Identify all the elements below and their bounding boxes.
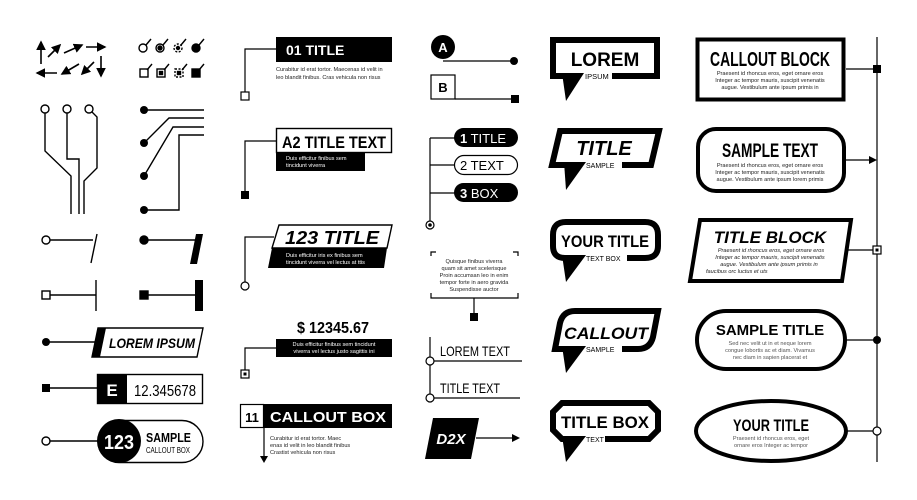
block: YOUR TITLE: ornare eros Integer ac tempor [734, 443, 808, 449]
label: 123 SAMPLE CALLOUT BOX: CALLOUT BOX [146, 445, 190, 455]
callout: A2 TITLE TEXT: tincidunt viverra [286, 163, 326, 169]
block: SAMPLE TITLE [697, 311, 881, 369]
callout: 11 CALLOUT BOX: CALLOUT BOX [270, 409, 386, 426]
block: TITLE BLOCK: Praesent id rhoncus eros, eget ornare eros [718, 248, 824, 254]
callout: 123 TITLE: Duis efficitur iris ex finibus sem [286, 253, 363, 259]
speech bubble: TITLE BOX: TITLE BOX [561, 413, 650, 432]
callout: $ 12345.67: viverra vel lectus justo sagittis ini [293, 349, 375, 355]
block: TITLE BLOCK: TITLE BLOCK [714, 228, 828, 247]
label: E 12.345678: 12.345678 [134, 383, 196, 400]
speech bubble: YOUR TITLE [553, 222, 658, 282]
block: SAMPLE TEXT: Integer ac tempor mauris, suscipit venenatis [715, 170, 825, 176]
speech bubble: LOREM: IPSUM [585, 72, 609, 81]
label: D2X arrow: D2X [436, 431, 467, 448]
block: CALLOUT BLOCK: CALLOUT BLOCK [710, 49, 830, 71]
text block: bracket: quam sit amet scelerisque [442, 266, 506, 272]
block: CALLOUT BLOCK: Integer ac tempor mauris, suscipit venenatis [715, 78, 825, 84]
label: E 12.345678: E [106, 381, 118, 400]
label: LOREM IPSUM: LOREM IPSUM [109, 335, 195, 351]
callout: 11 CALLOUT BOX: enas id velit in leo blandit finibus [270, 443, 350, 449]
label: A and B: B [438, 80, 448, 95]
block: SAMPLE TITLE: congue lobortis ac et diam. Vivamus [725, 348, 815, 354]
speech bubble: CALLOUT [555, 311, 658, 373]
callout: A2 TITLE TEXT: Duis efficitur finibus sem [286, 156, 347, 162]
list: LOREM TEXT / TITLE TEXT: LOREM TEXT [440, 343, 510, 359]
icon group: arrows [37, 42, 105, 76]
speech bubble: TITLE: TITLE [576, 138, 632, 160]
block: YOUR TITLE: Praesent id rhoncus eros, eget [733, 436, 810, 442]
text block: bracket [431, 252, 518, 321]
block: CALLOUT BLOCK [698, 40, 881, 100]
callout: 11 CALLOUT BOX: 11 [245, 410, 259, 425]
block: CALLOUT BLOCK: augue. Vestibulum ante ipsum primis in [721, 85, 819, 91]
callout: A2 TITLE TEXT: A2 TITLE TEXT [282, 133, 387, 152]
block: SAMPLE TEXT [698, 129, 877, 191]
speech bubble: TITLE [552, 131, 659, 190]
label: 123 SAMPLE CALLOUT BOX: 123 [104, 432, 134, 454]
label: 123 SAMPLE CALLOUT BOX [42, 419, 203, 463]
callout: 123 TITLE [241, 225, 392, 290]
label: 123 SAMPLE CALLOUT BOX: SAMPLE [146, 430, 191, 445]
callout: 11 CALLOUT BOX: Curabitur id erat tortor. Maec [270, 436, 341, 442]
callout: $ 12345.67 [241, 320, 392, 378]
label: E 12.345678 [42, 374, 202, 404]
icon group: check markers [139, 39, 204, 77]
callout: 01 TITLE: Curabitur id erat tortor. Maecenas id velit in [276, 67, 383, 73]
block: SAMPLE TEXT: Praesent id rhoncus eros, eget ornare eros [717, 163, 823, 169]
speech bubble: YOUR TITLE: TEXT BOX [586, 256, 621, 263]
text block: bracket: Quisque finibus viverra [446, 259, 503, 265]
list: LOREM TEXT / TITLE TEXT: TITLE TEXT [440, 380, 500, 396]
list: numbered pills: 1 TITLE [460, 131, 506, 146]
text block: bracket: Proin accumsan leo in enim [440, 273, 509, 279]
icon group: line terminators [42, 234, 203, 311]
callout: A2 TITLE TEXT [241, 128, 392, 199]
callout: 123 TITLE: tincidunt viverra vel lectus at ttis [286, 260, 365, 266]
callout: 01 TITLE: 01 TITLE [286, 42, 344, 58]
speech bubble: CALLOUT: CALLOUT [564, 324, 650, 343]
speech bubble: YOUR TITLE: YOUR TITLE [561, 232, 649, 251]
list: numbered pills: 2 TEXT [460, 158, 504, 173]
block: TITLE BLOCK: augue. Vestibulum ante ipsum primis in [720, 262, 818, 268]
icon group: circuit lines [41, 105, 97, 214]
callout: 01 TITLE: leo blandit finibus. Cras vehicula non risus [276, 75, 381, 81]
block: YOUR TITLE: YOUR TITLE [733, 416, 809, 435]
block: SAMPLE TEXT: augue. Vestibulum ante ipsum lorem primis [717, 177, 824, 183]
list: numbered pills [426, 128, 518, 229]
timeline spine [876, 37, 878, 462]
speech bubble: TITLE: SAMPLE [586, 163, 615, 170]
callout: 11 CALLOUT BOX [240, 404, 392, 463]
block: CALLOUT BLOCK: Praesent id rhoncus eros, eget ornare eros [717, 71, 823, 77]
speech bubble: LOREM: LOREM [571, 50, 639, 71]
speech bubble: CALLOUT: SAMPLE [586, 347, 615, 354]
block: SAMPLE TITLE: nec diam in sapien placerat et [733, 355, 808, 361]
callout: $ 12345.67: $ 12345.67 [297, 320, 369, 337]
label: A and B [431, 35, 519, 103]
block: SAMPLE TEXT: SAMPLE TEXT [722, 141, 818, 162]
block: TITLE BLOCK [690, 220, 881, 281]
text block: bracket: Suspendisse auctor [449, 287, 499, 293]
label: A and B: A [438, 40, 448, 55]
block: SAMPLE TITLE: SAMPLE TITLE [716, 322, 824, 339]
label: D2X arrow [425, 418, 520, 459]
callout: 01 TITLE [241, 37, 392, 100]
callout: 123 TITLE: 123 TITLE [285, 228, 380, 248]
callout: $ 12345.67: Duis efficitur finibus sem tincidunt [293, 342, 376, 348]
callout: 11 CALLOUT BOX: Crastist vehicula non risus [270, 450, 335, 456]
label: LOREM IPSUM [42, 328, 203, 357]
block: YOUR TITLE [696, 401, 881, 461]
block: SAMPLE TITLE: Sed nec velit ut in et neque lorem [728, 341, 812, 347]
speech bubble: LOREM [553, 40, 657, 101]
speech bubble: TITLE BOX: TEXT [586, 437, 605, 444]
text block: bracket: tempor forte in aero gravida [440, 280, 509, 286]
block: TITLE BLOCK: faucibus orc luctus et uts [706, 269, 768, 275]
list: LOREM TEXT / TITLE TEXT [426, 337, 522, 402]
list: numbered pills: 3 BOX [460, 186, 499, 201]
block: TITLE BLOCK: Integer ac tempor mauris, suscipit venenatis [715, 255, 825, 261]
speech bubble: TITLE BOX [553, 403, 658, 462]
icon group: bullet lines [140, 106, 204, 214]
